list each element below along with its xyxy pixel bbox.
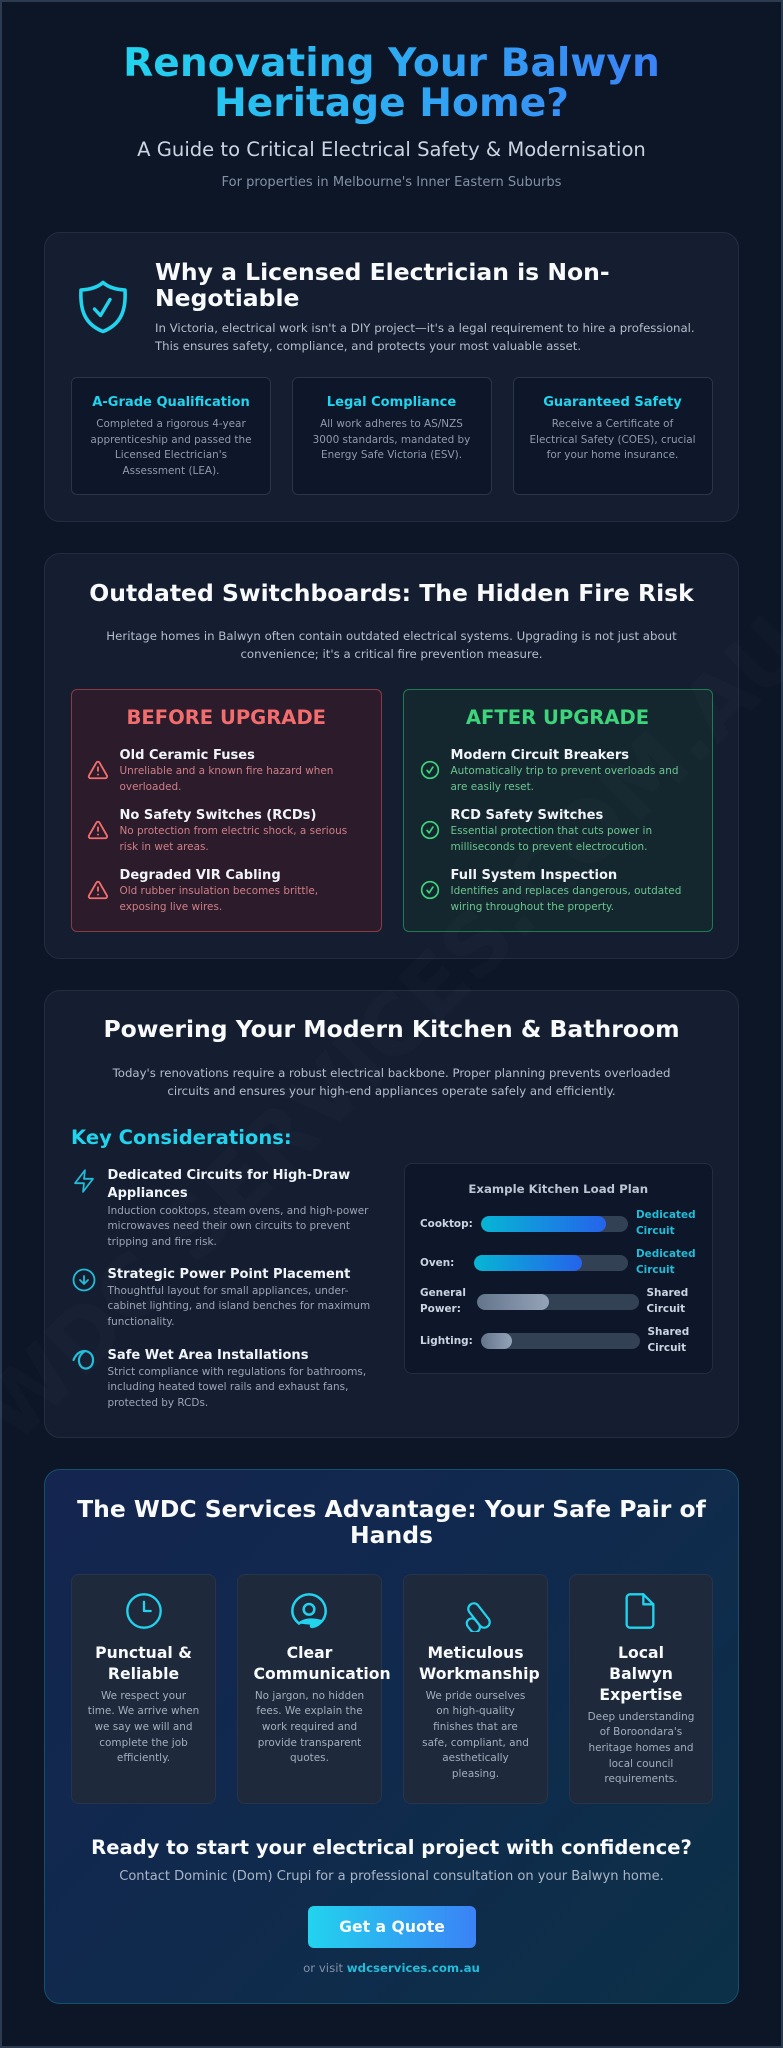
item: wet areas: Strict compliance with regulations for bathrooms, xyxy=(108,1366,366,1378)
heading: before upgrade: BEFORE UPGRADE xyxy=(126,706,326,729)
heading: WDC advantage xyxy=(77,1495,706,1549)
item: dedicated circuits: tripping and fire risk. xyxy=(108,1236,217,1248)
card: workmanship: Workmanship xyxy=(419,1664,540,1682)
icon: tools xyxy=(466,1602,491,1632)
item: degraded VIR cabling: Degraded VIR Cabling xyxy=(120,868,281,883)
icon: warning xyxy=(88,820,108,840)
row: cooktop xyxy=(420,1209,696,1237)
card: communication: work required and xyxy=(262,1721,357,1733)
card: punctual: time. We arrive when xyxy=(88,1705,199,1717)
card: workmanship: We pride ourselves xyxy=(426,1690,525,1702)
card: workmanship xyxy=(403,1574,548,1804)
heading: WDC advantage: Hands xyxy=(350,1521,433,1549)
heading: WDC advantage: The WDC Services Advantage: Your Safe Pair of xyxy=(77,1495,706,1523)
card: local expertise xyxy=(569,1574,713,1804)
heading: licensed electrician xyxy=(155,258,610,312)
row: general power: Shared xyxy=(646,1287,688,1299)
panel: switchboards xyxy=(44,553,739,959)
card: punctual: we say we will and xyxy=(94,1721,193,1733)
card: Legal Compliance: All work adheres to AS/NZS xyxy=(320,418,463,430)
subtitle: A Guide to Critical Electrical Safety & Modernisation xyxy=(137,138,646,161)
item: old ceramic fuses xyxy=(88,748,333,793)
row: cooktop: Circuit xyxy=(636,1225,675,1237)
card: local expertise: Deep understanding xyxy=(588,1711,694,1723)
row: oven: Circuit xyxy=(636,1264,675,1276)
header xyxy=(123,41,660,190)
icon: document xyxy=(626,1593,654,1629)
text: kitchen intro: circuits and ensures your high-end appliances operate safely and efficiently. xyxy=(167,1084,616,1098)
text: licensed intro: This ensures safety, compliance, and protects your most valuable asset. xyxy=(155,339,581,353)
card: Legal Compliance: Legal Compliance xyxy=(327,395,456,410)
icon: warning xyxy=(88,880,108,900)
card: Guaranteed Safety xyxy=(512,377,712,495)
card: Guaranteed Safety: for your home insurance. xyxy=(547,449,678,461)
title: Renovating Your Balwyn xyxy=(123,41,660,86)
item: old ceramic fuses: Old Ceramic Fuses xyxy=(120,748,255,763)
item: modern circuit breakers: Automatically trip to prevent overloads and xyxy=(450,765,678,777)
card: communication xyxy=(237,1574,382,1804)
icon: check circle xyxy=(420,760,440,780)
icon: check circle xyxy=(420,880,440,900)
item: dedicated circuits: Appliances xyxy=(108,1186,188,1201)
item: dedicated circuits: Dedicated Circuits for High-Draw xyxy=(108,1168,350,1183)
icon: check circle xyxy=(420,820,440,840)
title: Heritage Home? xyxy=(214,81,569,126)
item: power point placement xyxy=(72,1267,370,1328)
text: switchboards intro: Heritage homes in Balwyn often contain outdated electrical systems. Upgrading is not just about xyxy=(106,629,677,643)
row: general power xyxy=(420,1287,688,1315)
item: no safety switches xyxy=(88,808,347,853)
item: full system inspection: Full System Inspection xyxy=(450,868,617,883)
item: dedicated circuits: microwaves need their own circuits to prevent xyxy=(108,1220,350,1232)
row: general power: General xyxy=(420,1287,466,1299)
heading: licensed electrician: Negotiable xyxy=(155,284,299,312)
panel: licensed electrician xyxy=(44,232,739,522)
item: modern circuit breakers xyxy=(420,748,678,793)
item: no safety switches: No Safety Switches (RCDs) xyxy=(120,808,316,823)
row: oven: Oven: xyxy=(420,1257,454,1269)
heading: key considerations: Key Considerations: xyxy=(71,1126,292,1149)
card: Legal Compliance: 3000 standards, mandated by xyxy=(313,434,470,446)
card: A-Grade Qualification: Assessment (LEA). xyxy=(123,465,219,477)
row: lighting: Shared xyxy=(648,1326,689,1338)
card: workmanship: finishes that are xyxy=(433,1721,518,1733)
text: website: or visit wdcservices.com.au xyxy=(303,1960,480,1974)
card: communication: quotes. xyxy=(290,1752,329,1764)
card: communication: No jargon, no hidden xyxy=(255,1690,364,1702)
chart title: Example Kitchen Load Plan xyxy=(468,1182,648,1196)
card: local expertise: local council xyxy=(609,1758,673,1770)
item: RCD safety switches: RCD Safety Switches xyxy=(450,808,603,823)
heading: call to action: Ready to start your electrical project with confidence? xyxy=(91,1836,692,1859)
item: RCD safety switches: Essential protection that cuts power in xyxy=(450,825,652,837)
item: no safety switches: No protection from electric shock, a serious xyxy=(120,825,347,837)
text: contact line: Contact Dominic (Dom) Crupi for a professional consultation on your Balwyn home. xyxy=(119,1868,664,1884)
panel: WDC advantage xyxy=(44,1469,739,2004)
item: full system inspection xyxy=(420,868,681,913)
text: licensed intro: In Victoria, electrical work isn't a DIY project—it's a legal requirement to hire a professional. xyxy=(155,321,695,335)
icon: warning xyxy=(88,760,108,780)
card: communication: Clear xyxy=(287,1642,332,1662)
location note: For properties in Melbourne's Inner Eastern Suburbs xyxy=(222,175,561,190)
item: wet areas: Safe Wet Area Installations xyxy=(108,1348,308,1363)
item: no safety switches: risk in wet areas. xyxy=(120,841,209,853)
card: communication: Communication xyxy=(254,1664,391,1682)
item: wet areas xyxy=(72,1348,366,1409)
icon: circle arrow down xyxy=(72,1268,96,1292)
row: oven xyxy=(420,1248,696,1276)
card: workmanship: safe, compliant, and xyxy=(422,1737,529,1749)
item: old ceramic fuses: overloaded. xyxy=(120,781,181,793)
icon: ring xyxy=(72,1350,94,1370)
row: cooktop: Dedicated xyxy=(636,1209,696,1221)
card: Guaranteed Safety: Receive a Certificate of xyxy=(552,418,673,430)
item: full system inspection: Identifies and replaces dangerous, outdated xyxy=(450,885,681,897)
card: A-Grade Qualification: apprenticeship and passed the xyxy=(90,434,252,446)
item: dedicated circuits: Induction cooktops, steam ovens, and high-power xyxy=(108,1204,368,1216)
heading: after upgrade: AFTER UPGRADE xyxy=(466,706,649,729)
chart: kitchen load plan xyxy=(404,1163,712,1374)
row: oven: Dedicated xyxy=(636,1248,696,1260)
icon: clock xyxy=(126,1593,162,1629)
icon: person speech xyxy=(291,1593,327,1628)
row: general power: Circuit xyxy=(646,1303,685,1315)
row: lighting xyxy=(420,1326,689,1354)
item: wet areas: including heated towel rails and exhaust fans, xyxy=(108,1381,348,1393)
card: punctual: We respect your xyxy=(101,1690,186,1702)
title xyxy=(123,41,660,126)
card: punctual: efficiently. xyxy=(117,1752,170,1764)
item: old ceramic fuses: Unreliable and a known fire hazard when xyxy=(120,765,333,777)
card: Legal Compliance xyxy=(292,377,492,495)
text: switchboards intro xyxy=(106,629,677,661)
item: power point placement: cabinet lighting, and island benches for maximum xyxy=(108,1300,370,1312)
card: local expertise: Expertise xyxy=(599,1684,683,1704)
card: workmanship: on high-quality xyxy=(436,1705,515,1717)
card: punctual: Punctual & xyxy=(95,1642,192,1662)
button: get a quote: Get a Quote xyxy=(339,1917,445,1936)
row: lighting: Circuit xyxy=(648,1342,686,1354)
text: switchboards intro: convenience; it's a critical fire prevention measure. xyxy=(240,647,543,661)
card: A-Grade Qualification: A-Grade Qualification xyxy=(92,395,250,410)
item: RCD safety switches: milliseconds to prevent electrocution. xyxy=(450,841,647,853)
card: local expertise: Balwyn xyxy=(609,1664,673,1682)
card: A-Grade Qualification xyxy=(71,377,271,495)
row: general power: Power: xyxy=(420,1303,461,1315)
card: Legal Compliance: Energy Safe Victoria (ESV). xyxy=(321,449,462,461)
panel: kitchen and bathroom xyxy=(44,990,739,1438)
card: communication: provide transparent xyxy=(258,1737,361,1749)
card: Guaranteed Safety: Electrical Safety (COES), crucial xyxy=(529,434,696,446)
panel: before upgrade xyxy=(71,689,382,932)
card: workmanship: pleasing. xyxy=(452,1768,499,1780)
text: kitchen intro xyxy=(112,1066,670,1098)
icon: shield check xyxy=(79,280,127,334)
card: workmanship: aesthetically xyxy=(442,1752,509,1764)
card: local expertise: of Boroondara's xyxy=(600,1726,682,1738)
row: lighting: Lighting: xyxy=(420,1335,473,1347)
card: punctual xyxy=(71,1574,216,1804)
card: punctual: Reliable xyxy=(108,1664,179,1682)
heading: switchboards: Outdated Switchboards: The Hidden Fire Risk xyxy=(89,579,694,607)
item: RCD safety switches xyxy=(420,808,652,853)
item: power point placement: functionality. xyxy=(108,1316,174,1328)
heading: kitchen and bathroom: Powering Your Modern Kitchen & Bathroom xyxy=(103,1015,680,1043)
item: wet areas: protected by RCDs. xyxy=(108,1397,208,1409)
card: A-Grade Qualification: Completed a rigorous 4-year xyxy=(96,418,246,430)
item: power point placement: Thoughtful layout for small appliances, under- xyxy=(108,1284,348,1296)
item: full system inspection: wiring throughout the property. xyxy=(450,901,614,913)
card: communication: fees. We explain the xyxy=(256,1705,363,1717)
card: local expertise: Local xyxy=(618,1642,664,1662)
button: get a quote xyxy=(308,1906,476,1948)
card: local expertise: requirements. xyxy=(604,1773,678,1785)
text: licensed intro xyxy=(154,321,695,353)
card: punctual: complete the job xyxy=(99,1737,188,1749)
item: degraded VIR cabling: exposing live wires. xyxy=(120,901,222,913)
card: A-Grade Qualification: Licensed Electrician's xyxy=(115,449,227,461)
text: kitchen intro: Today's renovations require a robust electrical backbone. Proper planning prevents overloaded xyxy=(113,1066,670,1080)
item: degraded VIR cabling: Old rubber insulation becomes brittle, xyxy=(120,885,318,897)
item: power point placement: Strategic Power Point Placement xyxy=(108,1267,350,1282)
heading: licensed electrician: Why a Licensed Electrician is Non- xyxy=(155,258,610,286)
item: dedicated circuits xyxy=(74,1168,368,1248)
row: cooktop: Cooktop: xyxy=(420,1218,473,1230)
card: Guaranteed Safety: Guaranteed Safety xyxy=(543,395,682,410)
panel: after upgrade xyxy=(402,689,712,932)
card: local expertise: heritage homes and xyxy=(588,1742,694,1754)
card: workmanship: Meticulous xyxy=(427,1642,524,1662)
icon: lightning bolt xyxy=(74,1169,94,1193)
item: degraded VIR cabling xyxy=(88,868,318,913)
item: modern circuit breakers: are easily reset. xyxy=(450,781,534,793)
item: modern circuit breakers: Modern Circuit Breakers xyxy=(450,748,629,763)
